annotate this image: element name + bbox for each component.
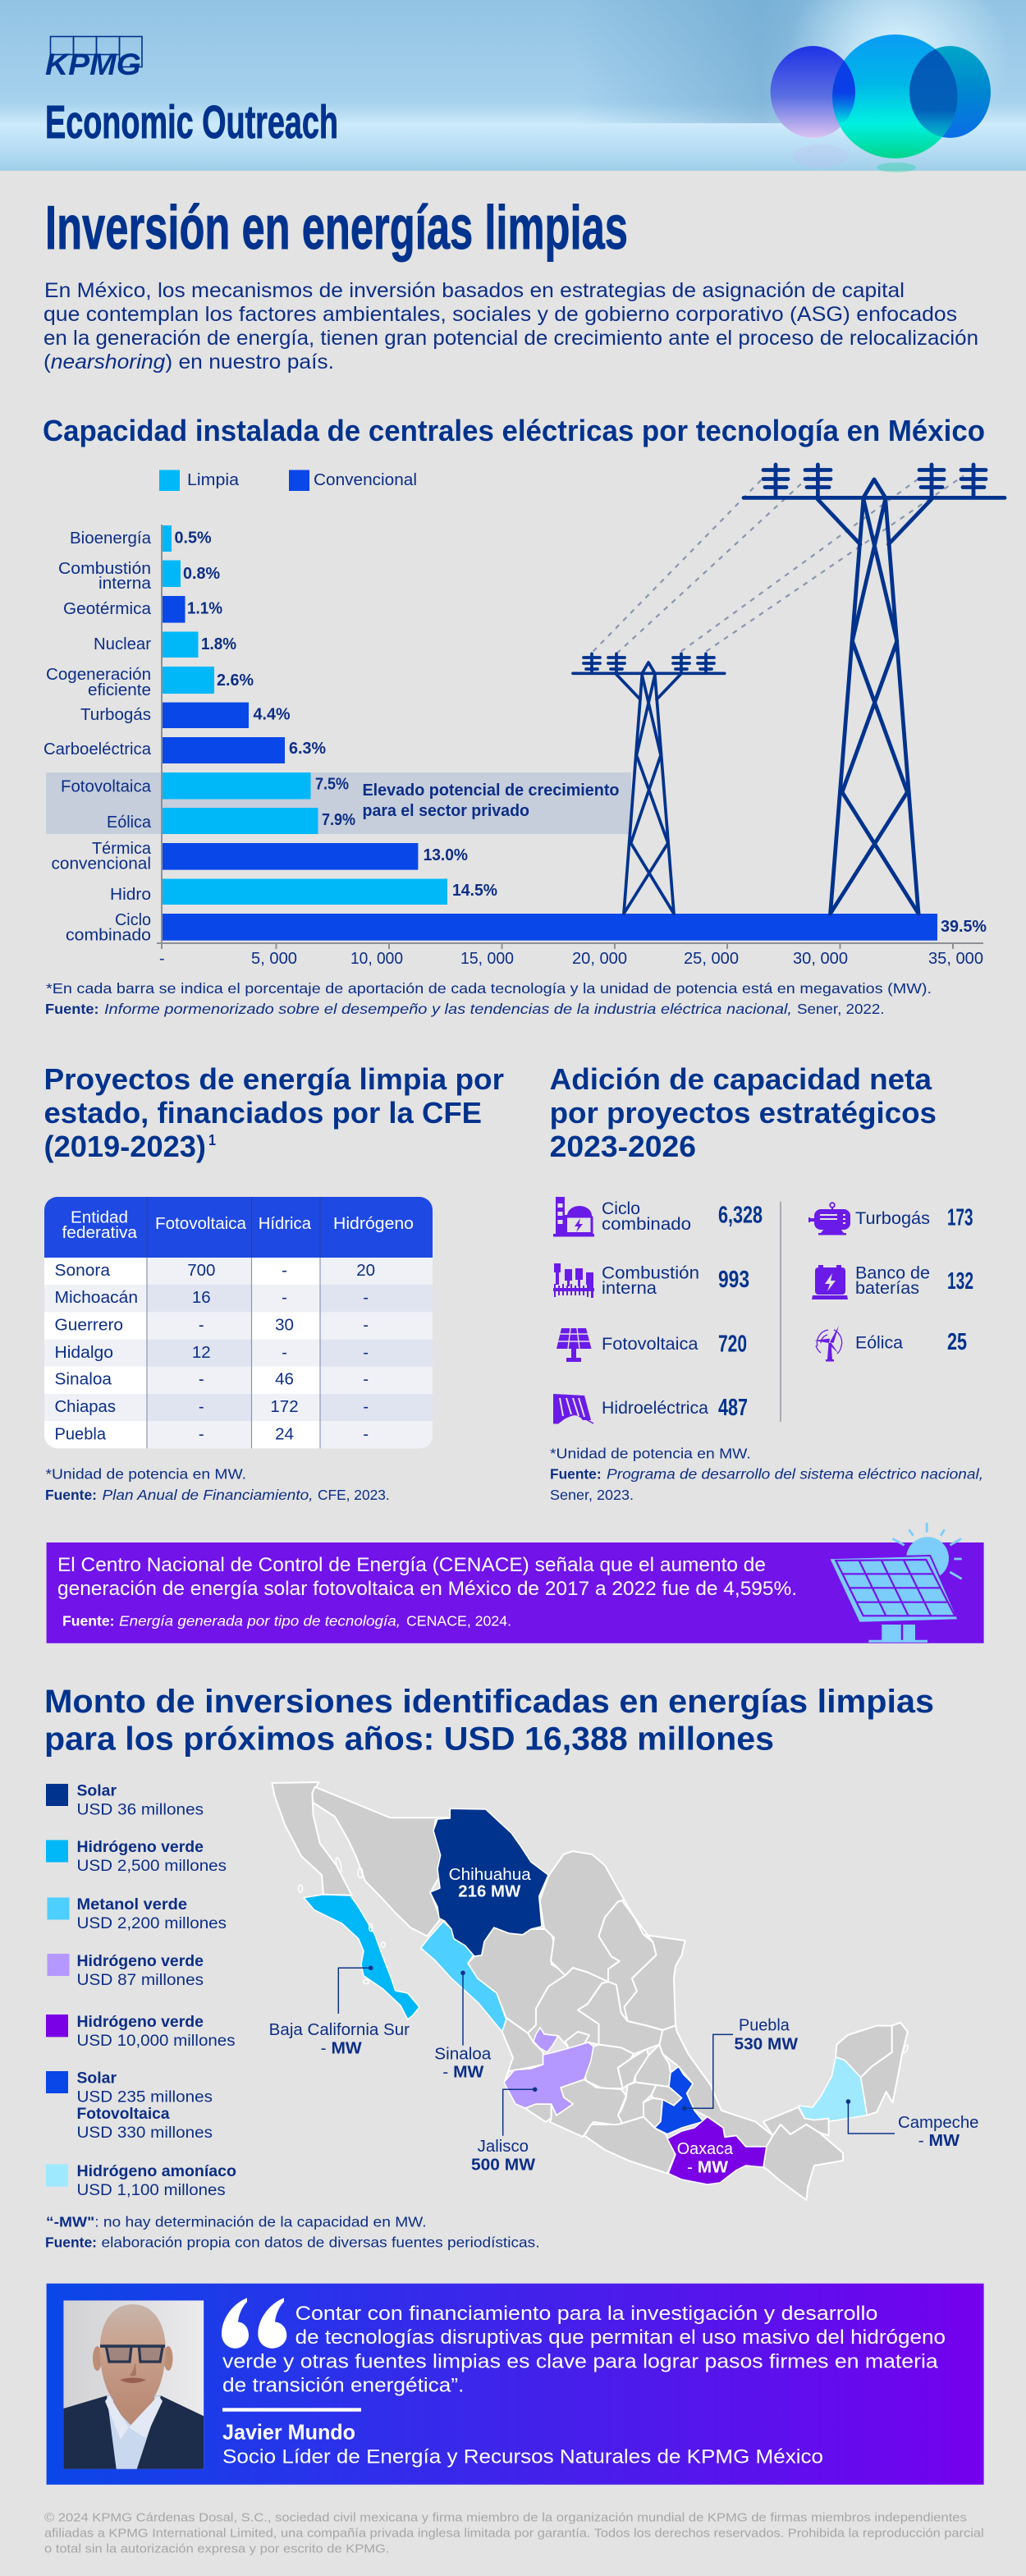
legend: metanol verde: Metanol verde bbox=[77, 1896, 187, 1914]
category labels: convencional bbox=[51, 855, 151, 873]
bar values: 6.3% bbox=[289, 740, 326, 758]
photo: Javier Mundo bbox=[63, 2300, 204, 2469]
table rows: - bbox=[199, 1425, 204, 1444]
legal footer: afiliadas a KPMG International Limited, una compañía privada inglesa limitada por garantía. Todos los derechos reservados. Prohibida la reproducción parcial bbox=[44, 2527, 984, 2541]
capacity item: hidroeléctrica: 487 bbox=[718, 1395, 748, 1421]
icon: quotation mark bbox=[222, 2298, 286, 2349]
Estado de Mexico bbox=[615, 2082, 657, 2125]
chart footnote bbox=[45, 980, 932, 1017]
table footnote: CFE, 2023. bbox=[318, 1487, 390, 1503]
quote author: Javier Mundo bbox=[222, 2420, 355, 2445]
table footnote: Fuente: bbox=[45, 1487, 97, 1503]
bar values: 1.8% bbox=[201, 635, 236, 653]
category labels: Ciclo bbox=[115, 911, 151, 929]
bar values: 13.0% bbox=[424, 846, 468, 864]
category labels: eficiente bbox=[88, 681, 151, 699]
chart footnote: Sener, 2022. bbox=[797, 1001, 885, 1017]
heading: investment amounts: para los próximos años: USD 16,388 millones bbox=[44, 1721, 774, 1758]
bar values: 7.5% bbox=[315, 776, 349, 794]
legend: hidrógeno amoníaco: Hidrógeno amoníaco bbox=[77, 2163, 236, 2180]
chart footnote: Fuente: bbox=[45, 1001, 98, 1017]
legend: solar y fotovoltaica: USD 330 millones bbox=[77, 2125, 213, 2142]
legend: solar 36: Solar bbox=[77, 1783, 117, 1799]
KPMG logo: KPMG bbox=[45, 48, 141, 81]
icon: solar panel with sun bbox=[829, 1523, 962, 1643]
capacity item: turbogás: 173 bbox=[947, 1205, 973, 1231]
callout: CENACE solar generation bbox=[47, 1523, 984, 1643]
legend: metanol verde: USD 2,200 millones bbox=[77, 1915, 227, 1932]
quote text: de tecnologías disruptivas que permitan el uso masivo del hidrógeno bbox=[295, 2326, 946, 2349]
Morelos bbox=[644, 2098, 662, 2128]
heading: clean energy projects: Proyectos de energía limpia por bbox=[44, 1062, 504, 1096]
capacity item: fotovoltaica: 720 bbox=[718, 1332, 747, 1358]
category labels: Carboeléctrica bbox=[44, 740, 152, 759]
table rows: 20 bbox=[356, 1261, 375, 1280]
chart legend bbox=[159, 470, 417, 491]
capacity item: eólica: 25 bbox=[947, 1329, 967, 1355]
bar values: 7.9% bbox=[322, 811, 355, 829]
Aguascalientes bbox=[566, 2032, 589, 2051]
icon: solar panel bbox=[557, 1328, 591, 1362]
bar values: 4.4% bbox=[253, 706, 291, 724]
table footnote: *Unidad de potencia en MW. bbox=[46, 1466, 246, 1483]
map label: Baja California Sur: Baja California Sur bbox=[269, 2021, 410, 2039]
illustration: large tower bbox=[744, 465, 1005, 914]
table footnote: Plan Anual de Financiamiento, bbox=[102, 1487, 314, 1503]
Tamaulipas bbox=[623, 1901, 685, 2030]
intro paragraph: (nearshoring ) en nuestro país. bbox=[44, 351, 334, 374]
map label: Campeche bbox=[898, 2114, 978, 2150]
table header bbox=[62, 1208, 414, 1242]
quote text: de transición energética”. bbox=[222, 2374, 464, 2396]
icon: gas turbine bbox=[808, 1203, 850, 1235]
capacity item: combustión interna: interna bbox=[602, 1279, 657, 1298]
Tlaxcala bbox=[652, 2085, 682, 2106]
legend: hidrógeno verde 87: USD 87 millones bbox=[77, 1972, 204, 1989]
state: Campeche bbox=[799, 2057, 867, 2121]
Coahuila bbox=[540, 1851, 625, 1982]
capacity footnote: Sener, 2023. bbox=[550, 1487, 634, 1503]
bar chart: installed capacity bbox=[44, 525, 987, 968]
table rows: - bbox=[363, 1397, 369, 1416]
quote text: verde y otras fuentes limpias es clave para lograr pasos firmes en materia bbox=[222, 2350, 938, 2372]
map label: Campeche: Campeche bbox=[898, 2114, 978, 2132]
header spheres bbox=[771, 34, 991, 172]
x axis labels: 20, 000 bbox=[572, 950, 627, 968]
legend: solar 36 bbox=[46, 1783, 204, 1819]
map label: Puebla: Puebla bbox=[739, 2016, 790, 2034]
capacity footnote: Programa de desarrollo del sistema eléctrico nacional, bbox=[607, 1466, 983, 1483]
table rows: Hidalgo bbox=[54, 1343, 113, 1362]
table rows: Chiapas bbox=[54, 1397, 116, 1416]
x axis labels: 10, 000 bbox=[350, 950, 403, 968]
table footnote bbox=[45, 1466, 390, 1503]
Zacatecas bbox=[528, 1968, 608, 2048]
illustration: power lines bbox=[593, 476, 964, 653]
map label: Baja California Sur: - MW bbox=[321, 2040, 362, 2058]
capacity item: banco de baterías: Banco de bbox=[855, 1264, 930, 1283]
capacity item: ciclo combinado: 6,328 bbox=[718, 1203, 763, 1229]
state: Oaxaca bbox=[667, 2117, 767, 2184]
map: Mexico by state bbox=[272, 1782, 909, 2200]
capacity footnote bbox=[550, 1446, 983, 1503]
Michoacan bbox=[550, 2079, 626, 2137]
header banner bbox=[0, 0, 1026, 172]
map label: Chihuahua: 216 MW bbox=[458, 1883, 520, 1901]
table rows: - bbox=[282, 1288, 287, 1307]
divider bbox=[780, 1202, 781, 1422]
map label: Chihuahua bbox=[449, 1866, 532, 1901]
x axis labels: 30, 000 bbox=[793, 950, 848, 968]
heading: net capacity addition: 2023-2026 bbox=[550, 1130, 696, 1163]
capacity item: banco de baterías: baterías bbox=[855, 1279, 919, 1298]
capacity item: ciclo combinado: Ciclo bbox=[602, 1199, 640, 1218]
category labels: combinado bbox=[66, 927, 151, 945]
table rows: - bbox=[282, 1261, 287, 1280]
heading: clean energy projects: estado, financiados por la CFE bbox=[44, 1096, 482, 1130]
table rows: Sinaloa bbox=[54, 1370, 112, 1389]
state: Puebla bbox=[655, 2066, 703, 2134]
state: Chihuahua bbox=[430, 1808, 548, 1956]
icon: internal combustion bbox=[553, 1263, 594, 1298]
capacity item: banco de baterías bbox=[812, 1264, 973, 1299]
table rows: Michoacán bbox=[54, 1288, 138, 1307]
map footnote: “-MW" : no hay determinación de la capacidad en MW. bbox=[46, 2214, 427, 2230]
x axis labels: 35, 000 bbox=[928, 950, 983, 968]
map label: Sinaloa bbox=[434, 2045, 492, 2082]
map footnote: Fuente: bbox=[45, 2235, 97, 2251]
table rows: 46 bbox=[275, 1370, 294, 1389]
capacity item: eólica: Eólica bbox=[855, 1334, 903, 1353]
quote text bbox=[222, 2303, 946, 2396]
callout: CENACE solar generation: CENACE, 2024. bbox=[406, 1613, 511, 1629]
legend: hidrógeno verde 2,500 bbox=[46, 1839, 227, 1875]
map label: Puebla: 530 MW bbox=[734, 2035, 798, 2053]
callout: CENACE solar generation: generación de energía solar fotovoltaica en México de 2017 a 2022 fue de 4,595%. bbox=[57, 1578, 797, 1600]
Yucatan bbox=[836, 2026, 892, 2078]
capacity item: hidroeléctrica bbox=[553, 1394, 748, 1423]
category labels: Cogeneración bbox=[46, 666, 151, 684]
chart legend: Limpia bbox=[187, 471, 240, 489]
legend: hidrógeno verde 2,500: USD 2,500 millones bbox=[77, 1858, 227, 1875]
table header: Fotovoltaica bbox=[155, 1214, 247, 1233]
capacity item: turbogás bbox=[808, 1203, 973, 1235]
quote author: Socio Líder de Energía y Recursos Naturales de KPMG México bbox=[222, 2446, 823, 2468]
Sonora bbox=[312, 1787, 449, 1937]
table rows: 16 bbox=[192, 1288, 211, 1307]
callout: CENACE solar generation: El Centro Nacional de Control de Energía (CENACE) señala que el aumento de bbox=[57, 1554, 766, 1576]
Hidalgo bbox=[635, 2045, 671, 2087]
chart heading: Capacidad instalada de centrales eléctricas por tecnología en México bbox=[43, 414, 985, 447]
Veracruz bbox=[659, 2026, 773, 2147]
legend: solar 36: USD 36 millones bbox=[77, 1801, 204, 1819]
illustration: small tower bbox=[573, 653, 725, 914]
state: Sinaloa bbox=[421, 1922, 506, 2032]
category labels: Bioenergía bbox=[70, 529, 152, 548]
Durango bbox=[468, 1927, 572, 2033]
x axis labels: 15, 000 bbox=[460, 950, 514, 968]
Guanajuato bbox=[584, 2045, 634, 2088]
table header: federativa bbox=[62, 1223, 138, 1242]
bar values: 39.5% bbox=[941, 918, 987, 936]
chart footnote: Informe pormenorizado sobre el desempeño y las tendencias de la industria eléctrica nacional, bbox=[104, 1001, 792, 1017]
x axis labels: - bbox=[159, 950, 165, 968]
chart legend: Convencional bbox=[314, 471, 417, 489]
legend: solar y fotovoltaica: USD 235 millones bbox=[77, 2089, 213, 2106]
intro paragraph: En México, los mecanismos de inversión basados en estrategias de asignación de capital bbox=[44, 279, 905, 302]
bar values: 2.6% bbox=[217, 672, 254, 690]
bar values: 1.1% bbox=[187, 600, 222, 618]
x axis labels: 5, 000 bbox=[251, 950, 297, 968]
map label: Chihuahua: Chihuahua bbox=[449, 1866, 532, 1884]
legend: solar y fotovoltaica: Fotovoltaica bbox=[77, 2106, 170, 2123]
San Luis Potosi bbox=[578, 1982, 662, 2054]
state: Baja California Sur bbox=[304, 1895, 419, 2019]
table rows: Puebla bbox=[54, 1425, 107, 1444]
table rows: - bbox=[199, 1397, 204, 1416]
table rows: Guerrero bbox=[54, 1315, 123, 1335]
category labels: Turbogás bbox=[80, 706, 151, 724]
table rows: 12 bbox=[192, 1343, 211, 1362]
heading: clean energy projects: (2019-2023) bbox=[44, 1130, 206, 1163]
legal footer bbox=[44, 2511, 984, 2555]
heading: clean energy projects bbox=[44, 1062, 504, 1163]
legend: solar y fotovoltaica bbox=[46, 2070, 213, 2142]
legend: hidrógeno amoníaco: USD 1,100 millones bbox=[77, 2182, 226, 2199]
map label: Jalisco: Jalisco bbox=[478, 2138, 529, 2156]
category labels: Hidro bbox=[110, 886, 151, 904]
heading: clean energy projects: 1 bbox=[208, 1132, 216, 1148]
quote text: Contar con financiamiento para la investigación y desarrollo bbox=[295, 2303, 877, 2325]
Chiapas bbox=[763, 2125, 843, 2200]
icon: wind turbine bbox=[814, 1326, 842, 1361]
table rows: 172 bbox=[270, 1397, 299, 1416]
table: projects by state bbox=[44, 1197, 433, 1449]
legend: hidrógeno amoníaco bbox=[46, 2163, 236, 2199]
legal footer: o total sin la autorización expresa y por escrito de KPMG. bbox=[44, 2542, 389, 2555]
leader lines bbox=[338, 1968, 895, 2136]
category labels: Combustión bbox=[58, 560, 151, 578]
main title: Inversión en energías limpias bbox=[45, 193, 628, 262]
bar values bbox=[174, 529, 987, 936]
table header: Hídrica bbox=[259, 1214, 312, 1233]
legend: hidrógeno verde 10,000 bbox=[46, 2014, 235, 2050]
capacity item: combustión interna: Combustión bbox=[602, 1264, 699, 1283]
legend: hidrógeno verde 87: Hidrógeno verde bbox=[77, 1953, 204, 1970]
islands bbox=[299, 1857, 909, 2053]
callout: CENACE solar generation: Energía generada por tipo de tecnología, bbox=[119, 1613, 401, 1629]
capacity item: ciclo combinado bbox=[553, 1197, 763, 1236]
capacity item: eólica bbox=[814, 1326, 967, 1361]
bar values: 0.8% bbox=[183, 565, 220, 583]
intro paragraph bbox=[44, 279, 978, 374]
map label: Oaxaca: Oaxaca bbox=[677, 2140, 734, 2158]
map footnote: elaboración propia con datos de diversas fuentes periodísticas. bbox=[102, 2235, 540, 2251]
capacity item: combustión interna: 993 bbox=[718, 1267, 749, 1293]
table rows: - bbox=[363, 1288, 369, 1307]
table rows: - bbox=[199, 1370, 204, 1389]
state: Jalisco bbox=[504, 2028, 593, 2115]
table header: Hidrógeno bbox=[333, 1214, 414, 1233]
intro paragraph: en la generación de energía, tienen gran potencial de crecimiento ante el proceso de relocalización bbox=[44, 327, 978, 350]
map footnote bbox=[45, 2214, 540, 2251]
Quintana Roo bbox=[861, 2023, 908, 2115]
Tabasco bbox=[763, 2107, 829, 2136]
map label: Jalisco: 500 MW bbox=[471, 2156, 535, 2174]
category labels: Nuclear bbox=[94, 635, 151, 653]
callout: CENACE solar generation: Fuente: bbox=[62, 1613, 115, 1629]
quote panel bbox=[47, 2284, 984, 2485]
map label: Sinaloa: - MW bbox=[442, 2064, 483, 2082]
table rows bbox=[54, 1261, 375, 1444]
legend: hidrógeno verde 2,500: Hidrógeno verde bbox=[77, 1839, 204, 1856]
capacity footnote: Fuente: bbox=[550, 1466, 602, 1483]
map label: Oaxaca: - MW bbox=[687, 2158, 728, 2176]
category labels: Geotérmica bbox=[63, 600, 152, 618]
category labels: Térmica bbox=[92, 840, 152, 858]
legend: metanol verde bbox=[48, 1896, 227, 1932]
map label: Oaxaca bbox=[677, 2140, 734, 2176]
heading: investment amounts bbox=[44, 1684, 934, 1758]
map label: Baja California Sur bbox=[269, 2021, 410, 2058]
capacity item: fotovoltaica: Fotovoltaica bbox=[602, 1335, 699, 1354]
table rows: Sonora bbox=[54, 1261, 111, 1280]
Nuevo Leon bbox=[599, 1900, 657, 2021]
Colima bbox=[525, 2104, 552, 2122]
capacity item: combustión interna bbox=[553, 1263, 749, 1298]
table rows: - bbox=[363, 1343, 369, 1362]
callout: growth potential bbox=[363, 782, 619, 820]
highlight band bbox=[46, 772, 631, 834]
capacity item: hidroeléctrica: Hidroeléctrica bbox=[602, 1399, 708, 1418]
capacity item: turbogás: Turbogás bbox=[855, 1209, 930, 1228]
capacity item: fotovoltaica bbox=[557, 1328, 747, 1362]
capacity item: banco de baterías: 132 bbox=[947, 1268, 973, 1295]
quote author bbox=[222, 2420, 823, 2468]
map label: Campeche: - MW bbox=[918, 2132, 960, 2150]
heading: net capacity addition bbox=[550, 1062, 937, 1163]
table header: Entidad bbox=[71, 1208, 128, 1227]
Guerrero bbox=[584, 2117, 676, 2174]
publication name: Economic Outreach bbox=[45, 96, 338, 149]
x axis labels: 25, 000 bbox=[684, 950, 739, 968]
icon: combined cycle plant bbox=[553, 1197, 594, 1236]
heading: investment amounts: Monto de inversiones identificadas en energías limpias bbox=[44, 1684, 934, 1720]
map label: Sinaloa: Sinaloa bbox=[434, 2045, 492, 2063]
x axis labels bbox=[159, 950, 983, 968]
bar values: 14.5% bbox=[452, 882, 497, 900]
map legend bbox=[46, 1783, 236, 2199]
Baja California bbox=[272, 1782, 352, 1895]
callout: growth potential: para el sector privado bbox=[363, 802, 529, 820]
legend: hidrógeno verde 87 bbox=[48, 1953, 204, 1989]
legend: hidrógeno verde 10,000: USD 10,000 millones bbox=[77, 2033, 235, 2050]
map label: Jalisco bbox=[471, 2138, 535, 2174]
chart footnote: *En cada barra se indica el porcentaje de aportación de cada tecnología y la unidad de potencia está en megavatios (MW). bbox=[46, 980, 932, 997]
map label: Puebla bbox=[734, 2016, 798, 2053]
category labels: interna bbox=[98, 575, 152, 593]
category labels: Eólica bbox=[107, 814, 152, 832]
category labels: Fotovoltaica bbox=[61, 778, 152, 796]
capacity footnote: *Unidad de potencia en MW. bbox=[550, 1446, 751, 1462]
heading: net capacity addition: por proyectos estratégicos bbox=[550, 1096, 937, 1130]
legend: solar y fotovoltaica: Solar bbox=[77, 2070, 117, 2088]
icon: battery bbox=[812, 1265, 848, 1299]
table rows: 30 bbox=[275, 1315, 294, 1335]
Nayarit bbox=[502, 2018, 543, 2081]
table rows: - bbox=[199, 1315, 204, 1335]
legend: hidrógeno verde 10,000: Hidrógeno verde bbox=[77, 2014, 204, 2031]
legal footer: © 2024 KPMG Cárdenas Dosal, S.C., sociedad civil mexicana y firma miembro de la organización mundial de KPMG de firmas miembros independientes bbox=[44, 2511, 967, 2525]
table rows: 24 bbox=[275, 1425, 294, 1444]
icon: dam bbox=[553, 1394, 593, 1423]
capacity item: ciclo combinado: combinado bbox=[602, 1215, 691, 1234]
table rows: - bbox=[363, 1370, 369, 1389]
table rows: - bbox=[282, 1343, 287, 1362]
bar values: 0.5% bbox=[174, 529, 212, 548]
Queretaro bbox=[618, 2049, 648, 2088]
category labels bbox=[44, 529, 152, 945]
heading: net capacity addition: Adición de capacidad neta bbox=[550, 1062, 932, 1096]
callout: growth potential: Elevado potencial de crecimiento bbox=[363, 782, 619, 800]
table rows: - bbox=[363, 1315, 369, 1335]
table rows: - bbox=[363, 1425, 369, 1444]
intro paragraph: que contemplan los factores ambientales, sociales y de gobierno corporativo (ASG) enfocados bbox=[44, 303, 957, 326]
table rows: 700 bbox=[187, 1261, 215, 1280]
